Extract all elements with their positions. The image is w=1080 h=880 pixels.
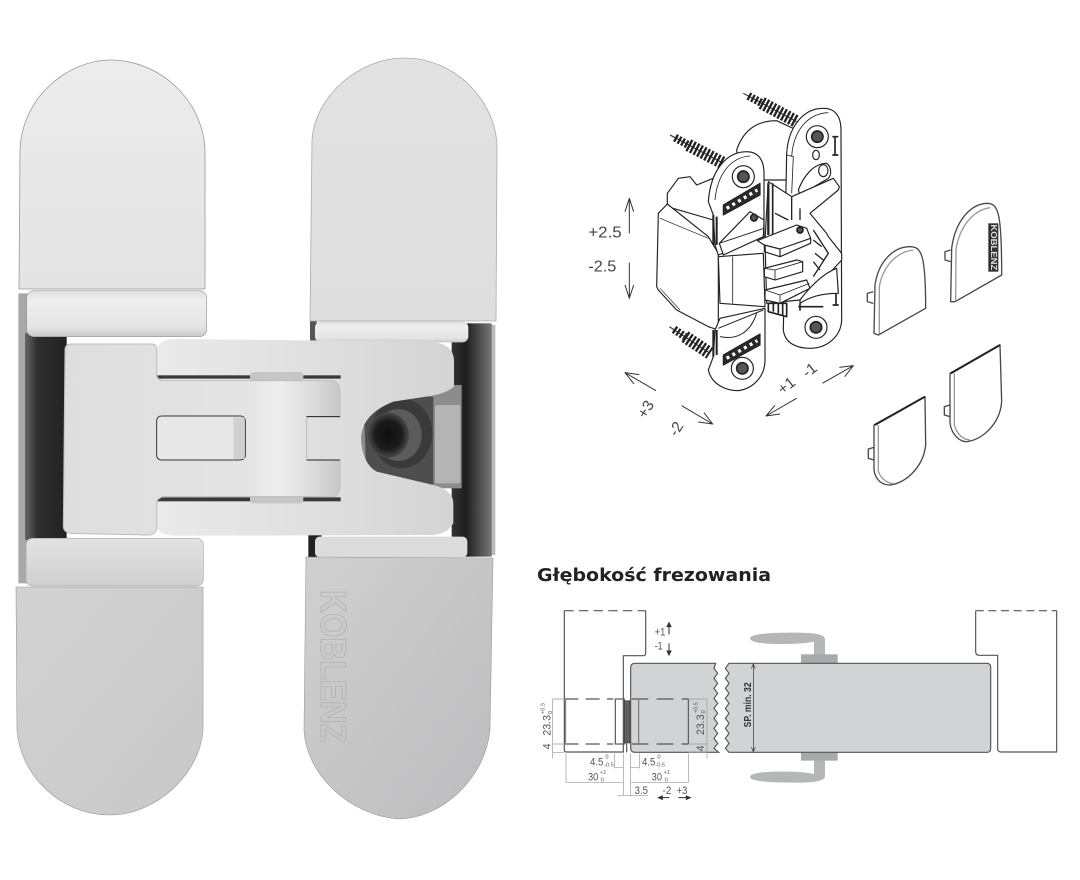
cover: lower left (868, 397, 926, 485)
dimension labels: -1 (655, 640, 663, 652)
dimension labels: SP. min. 32 (743, 682, 754, 727)
dimension labels: +3 (677, 785, 687, 797)
dimension labels: +1 (664, 770, 670, 776)
dimension labels: 0 (601, 777, 604, 783)
door handles (750, 633, 838, 783)
left hinge plate (708, 152, 765, 391)
dimension labels: 30 (588, 772, 598, 784)
left door frame (564, 611, 646, 752)
dimension labels: 0 (657, 754, 660, 760)
cover: lower right (944, 345, 1002, 442)
adjustment labels: -1 (799, 360, 821, 381)
SP min dimension (751, 664, 755, 752)
dimension labels: -2 (663, 785, 671, 797)
dimension labels: 0 (548, 711, 554, 714)
central knuckle and arms (718, 178, 842, 317)
door leaf (631, 663, 991, 752)
adjustment labels: -2.5 (588, 259, 616, 276)
right hinge plate (783, 108, 842, 348)
dimension labels: +0.5 (693, 702, 699, 713)
adjustment labels: +3 (634, 398, 658, 421)
dimension labels: 4.5 (590, 757, 603, 769)
section drawing: milling depth (541, 611, 1057, 799)
dimension labels: +1 (600, 770, 606, 776)
adjustment labels: +2.5 (588, 225, 622, 242)
adjustment labels (588, 225, 821, 439)
dimension labels: 4 (695, 745, 707, 751)
photo: white concealed hinge (16, 58, 497, 819)
dimension labels (541, 627, 754, 797)
dimension labels: 0 (701, 710, 707, 713)
exploded hinge line drawing (588, 93, 853, 439)
hinge rear housing (657, 121, 797, 330)
dimension labels: +0.5 (541, 703, 547, 714)
heading: Głębokość frezowania (537, 566, 771, 586)
cover: upper right with logo: KOBLENZ (989, 224, 998, 270)
bottom left cap (16, 587, 203, 815)
dimension labels: 0 (605, 754, 608, 760)
four cover caps line drawing (867, 203, 1002, 485)
right door frame (976, 611, 1057, 752)
dimension labels: 23.3 (695, 714, 707, 735)
adjustment labels: -2 (666, 419, 687, 439)
bottom right cap with embossed logo: KOBLENZ (313, 590, 354, 743)
top right cap (310, 58, 497, 321)
dimension labels: 0 (665, 777, 668, 783)
adjustment arrows (625, 198, 853, 424)
cover: upper left (867, 247, 926, 335)
dimension lines (553, 699, 707, 797)
dimension labels: 23.3 (542, 715, 554, 736)
dimension labels: 30 (652, 772, 662, 784)
dimension labels: -0.5 (604, 763, 614, 769)
dimension labels: 4.5 (642, 757, 655, 769)
adjustment arrows (658, 623, 690, 799)
dimension labels: +1 (655, 627, 665, 639)
hinge body and centre mechanism (18, 291, 495, 586)
screws (669, 93, 797, 353)
top left cap (19, 60, 205, 289)
bottom right cap with embossed logo (304, 557, 493, 819)
dimension labels: 3.5 (635, 785, 648, 797)
hinge pockets (564, 699, 688, 744)
dimension labels: 4 (542, 743, 554, 749)
adjustment labels: +1 (775, 374, 799, 398)
dimension labels: -0.5 (655, 763, 665, 769)
cover: upper right with logo (945, 203, 1002, 302)
